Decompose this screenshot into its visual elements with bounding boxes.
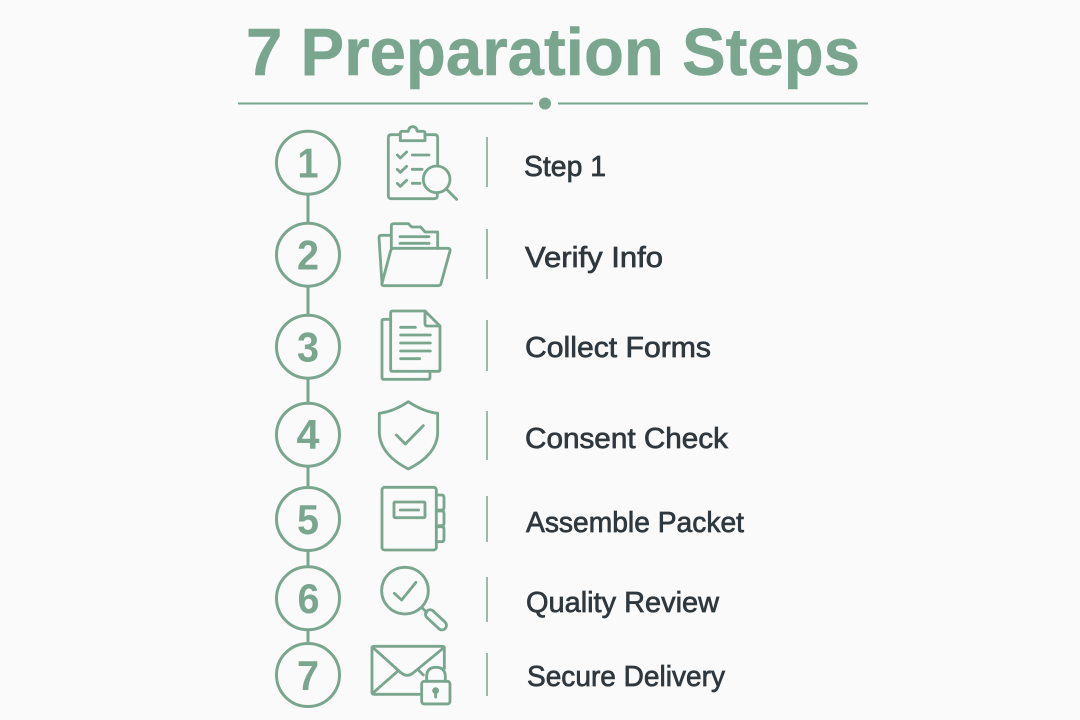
label: Step 1 <box>524 151 606 183</box>
label: Consent Check <box>525 423 729 455</box>
divider <box>486 137 488 187</box>
step 7 <box>276 644 725 706</box>
title: 7 Preparation Steps <box>246 15 860 90</box>
number badge 5 <box>276 488 340 550</box>
step 2 <box>276 223 663 286</box>
number badge 6: 6 <box>298 575 320 622</box>
label: Verify Info <box>525 242 663 274</box>
title rule with dot <box>238 98 868 110</box>
icon: tabbed binder <box>382 487 444 550</box>
icon: document stack <box>382 311 440 379</box>
icon: open folder <box>379 224 450 286</box>
number badge 5: 5 <box>297 496 319 543</box>
step 3 <box>276 311 711 379</box>
label: Secure Delivery <box>527 661 725 693</box>
timeline connector <box>306 195 310 643</box>
number badge 4 <box>276 403 340 466</box>
icon: shield with check <box>379 402 438 469</box>
divider <box>486 653 488 696</box>
number badge 1: 1 <box>298 140 318 186</box>
number badge 4: 4 <box>296 411 320 458</box>
divider <box>486 229 488 279</box>
number badge 2 <box>276 223 340 286</box>
label: Quality Review <box>526 587 720 619</box>
divider <box>486 496 488 542</box>
divider <box>486 411 488 460</box>
icon: envelope with padlock <box>372 646 450 704</box>
divider <box>486 320 488 371</box>
icon: magnifier with check <box>382 567 448 632</box>
divider <box>486 577 488 622</box>
label: Assemble Packet <box>526 507 744 539</box>
step 4 <box>276 402 729 469</box>
number badge 3 <box>276 315 340 378</box>
number badge 7 <box>276 644 340 706</box>
step 5 <box>276 487 744 550</box>
number badge 3: 3 <box>297 324 319 371</box>
step 1 <box>276 127 606 199</box>
number badge 6 <box>276 567 340 630</box>
step 6 <box>276 567 720 632</box>
icon: clipboard with magnifier <box>388 127 457 199</box>
number badge 1 <box>276 131 340 194</box>
number badge 7: 7 <box>297 652 319 699</box>
number badge 2: 2 <box>297 232 319 278</box>
label: Collect Forms <box>525 332 711 364</box>
